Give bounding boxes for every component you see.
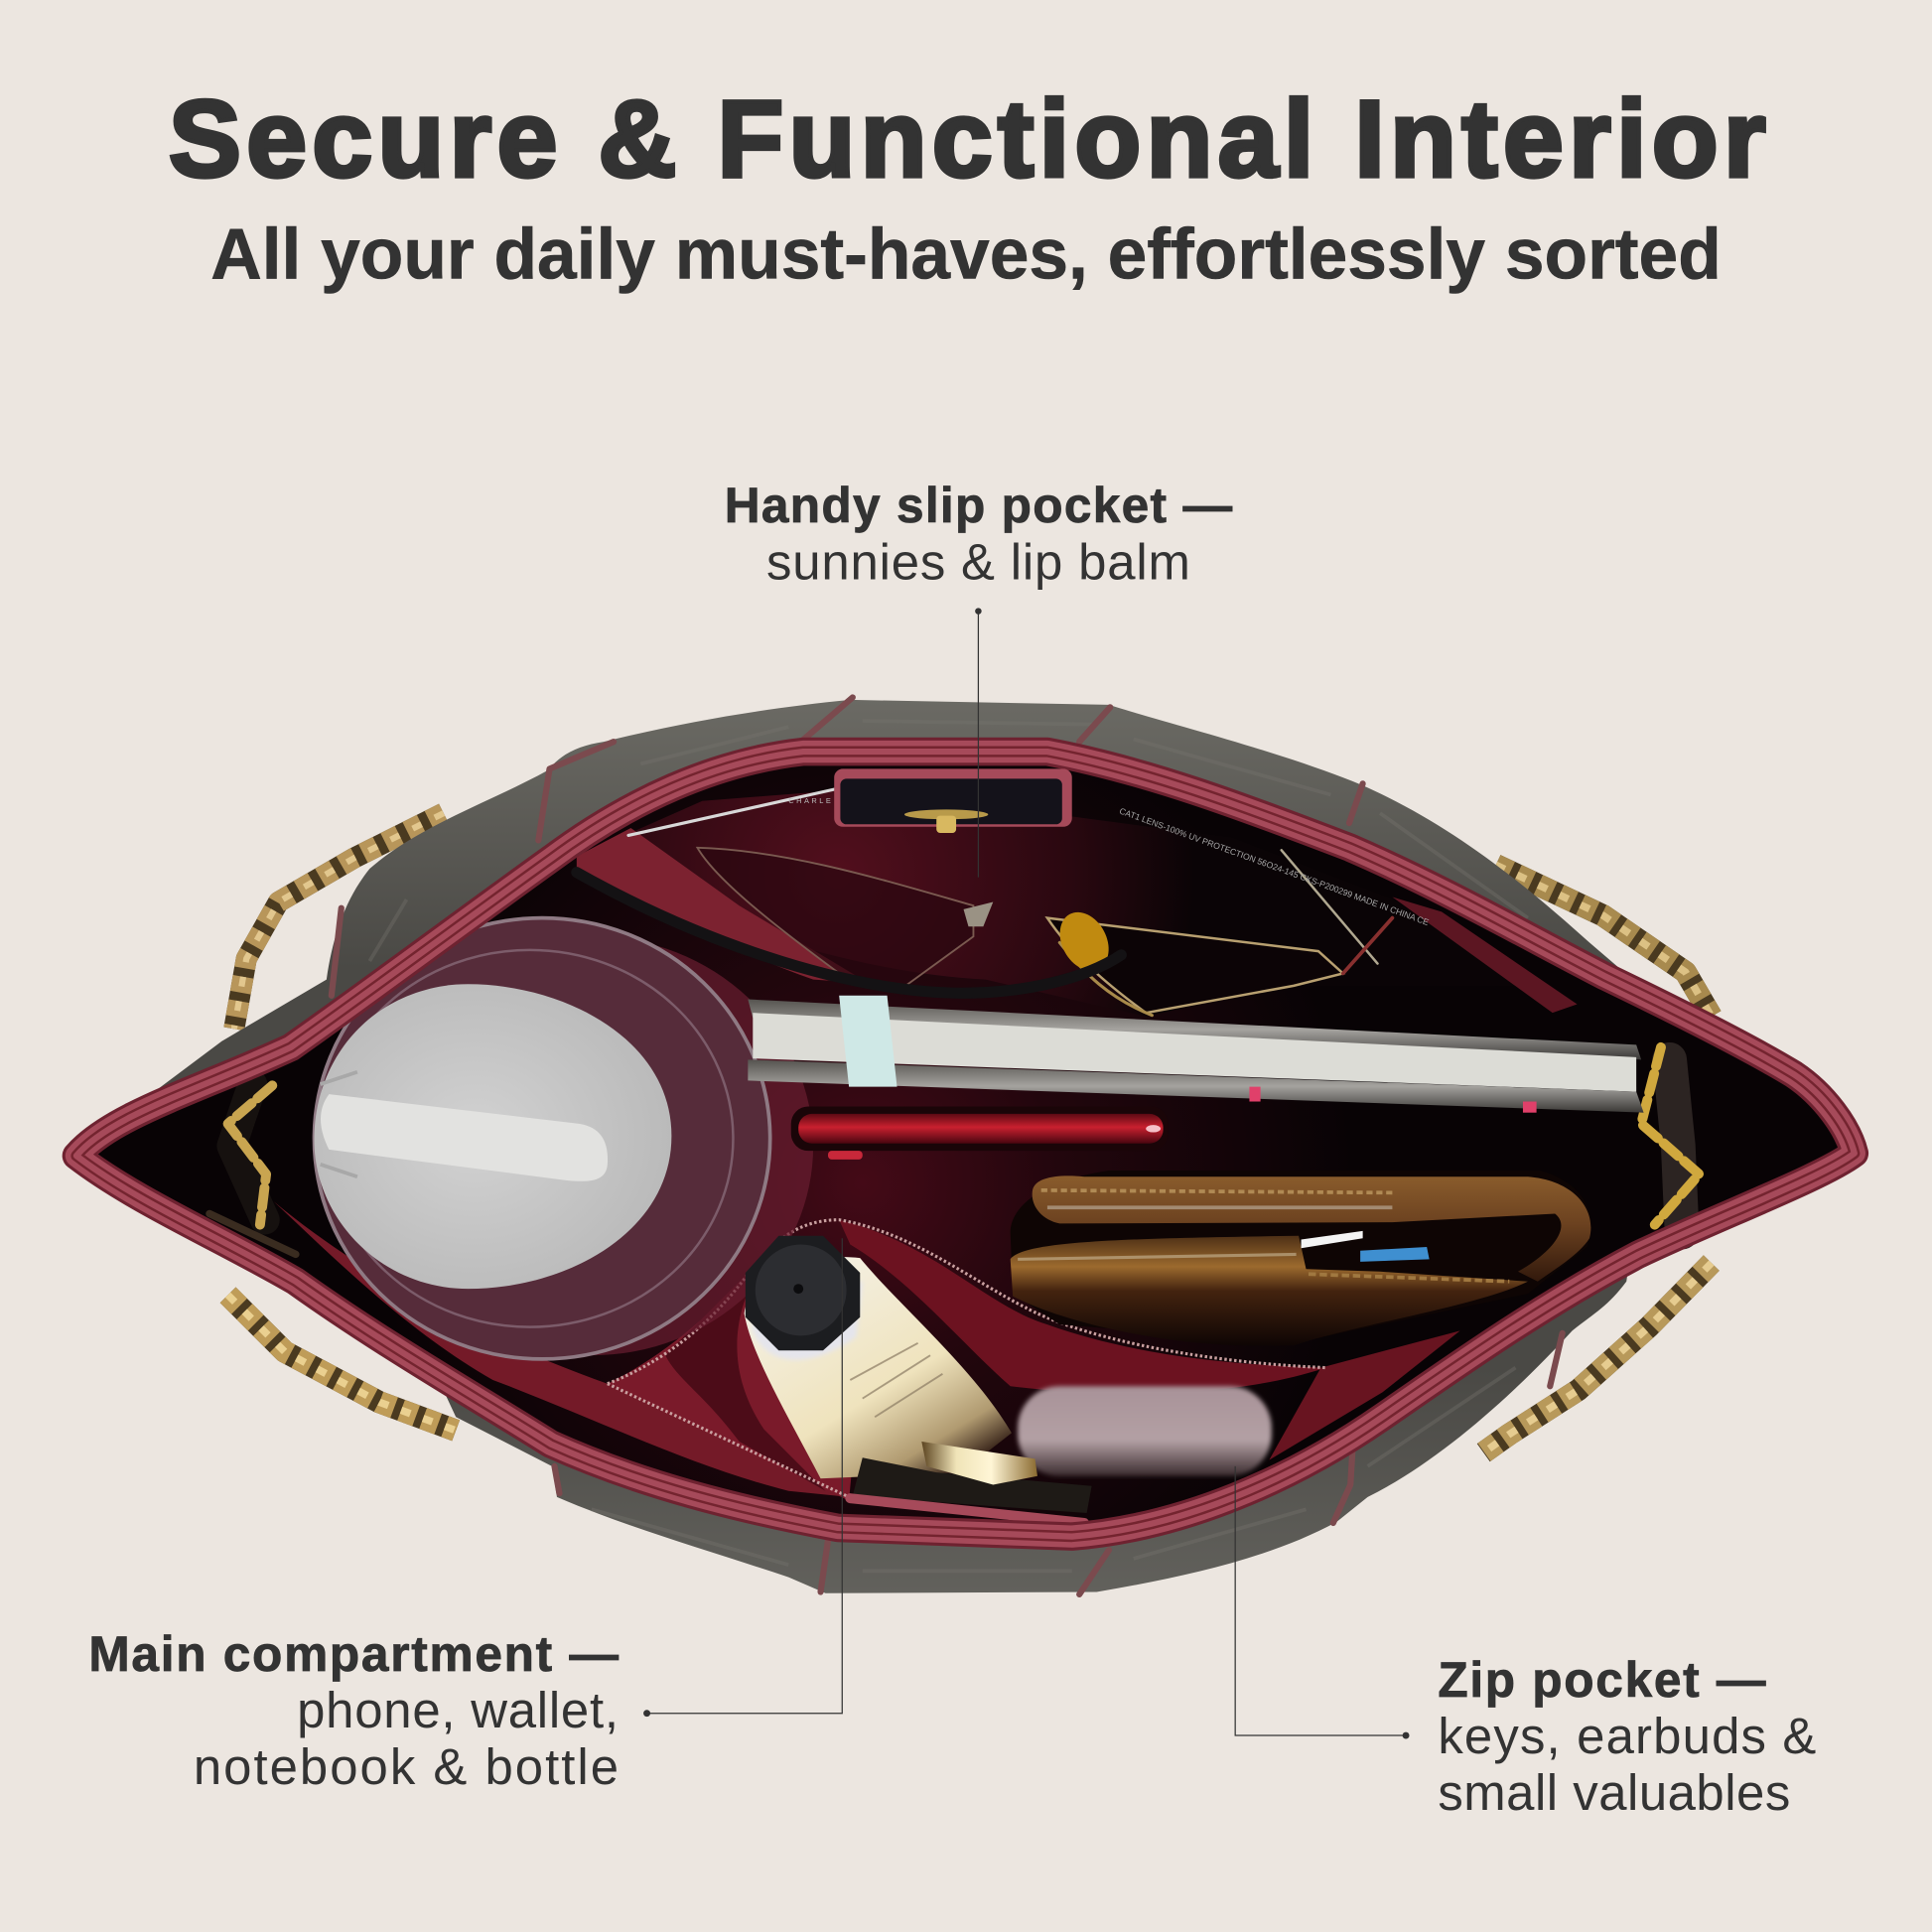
callout: main compartment: Main compartment —	[88, 1626, 619, 1682]
bottom flap and gold snap	[850, 1442, 1092, 1523]
earbuds case	[1018, 1386, 1272, 1476]
interior	[76, 752, 1855, 1537]
shell seams	[332, 697, 1563, 1594]
slip pocket lining	[577, 788, 1578, 1017]
phone	[791, 1106, 1169, 1160]
callout: zip pocket: Zip pocket —	[1438, 1652, 1766, 1708]
inner chains and straps	[209, 1047, 1699, 1254]
top flap with snap	[834, 768, 1072, 833]
rim piping	[76, 752, 1855, 1537]
callout: main compartment: phone, wallet,	[297, 1682, 619, 1738]
callout: handy slip pocket: Handy slip pocket —	[725, 478, 1232, 533]
callout: handy slip pocket: sunnies & lip balm	[766, 533, 1190, 590]
leader line: zip pocket	[1235, 1466, 1410, 1739]
cream lotion bottle	[745, 1236, 1012, 1478]
leader line: slip pocket	[975, 608, 982, 878]
title: Secure & Functional Interior	[169, 78, 1765, 200]
wallet	[1011, 1171, 1591, 1346]
water bottle	[314, 918, 813, 1359]
subtitle: All your daily must-haves, effortlessly sorted	[210, 214, 1722, 294]
notebook	[748, 996, 1644, 1113]
lower lining and pocket	[274, 1201, 1460, 1501]
sunglasses: CAT1 LENS-100% UV PROTECTION 56O24-145 CKS-P200299 MADE IN CHINA CE	[1118, 806, 1431, 927]
callout: zip pocket: small valuables	[1438, 1764, 1790, 1821]
cap	[746, 1236, 860, 1350]
leather shell	[148, 700, 1651, 1593]
callout: handy slip pocket	[725, 478, 1232, 590]
bag photo illustration	[76, 697, 1855, 1594]
sunglasses: CHARLE	[788, 796, 833, 805]
leader line: main compartment	[643, 1238, 842, 1717]
label text lines	[850, 1343, 942, 1417]
callout: main compartment: notebook & bottle	[194, 1738, 619, 1795]
sunglasses	[628, 788, 1431, 1016]
bottle handle	[321, 1094, 608, 1181]
leather texture	[369, 721, 1528, 1571]
bottle lid	[314, 984, 671, 1289]
callout: zip pocket	[1438, 1652, 1816, 1821]
outer chains	[228, 813, 1712, 1452]
callout: main compartment	[88, 1626, 619, 1795]
elastic band	[839, 996, 897, 1087]
callout: zip pocket: keys, earbuds &	[1438, 1708, 1816, 1764]
wallet cards	[1302, 1231, 1363, 1248]
black strap	[577, 873, 1121, 993]
zipper	[608, 1220, 1325, 1497]
